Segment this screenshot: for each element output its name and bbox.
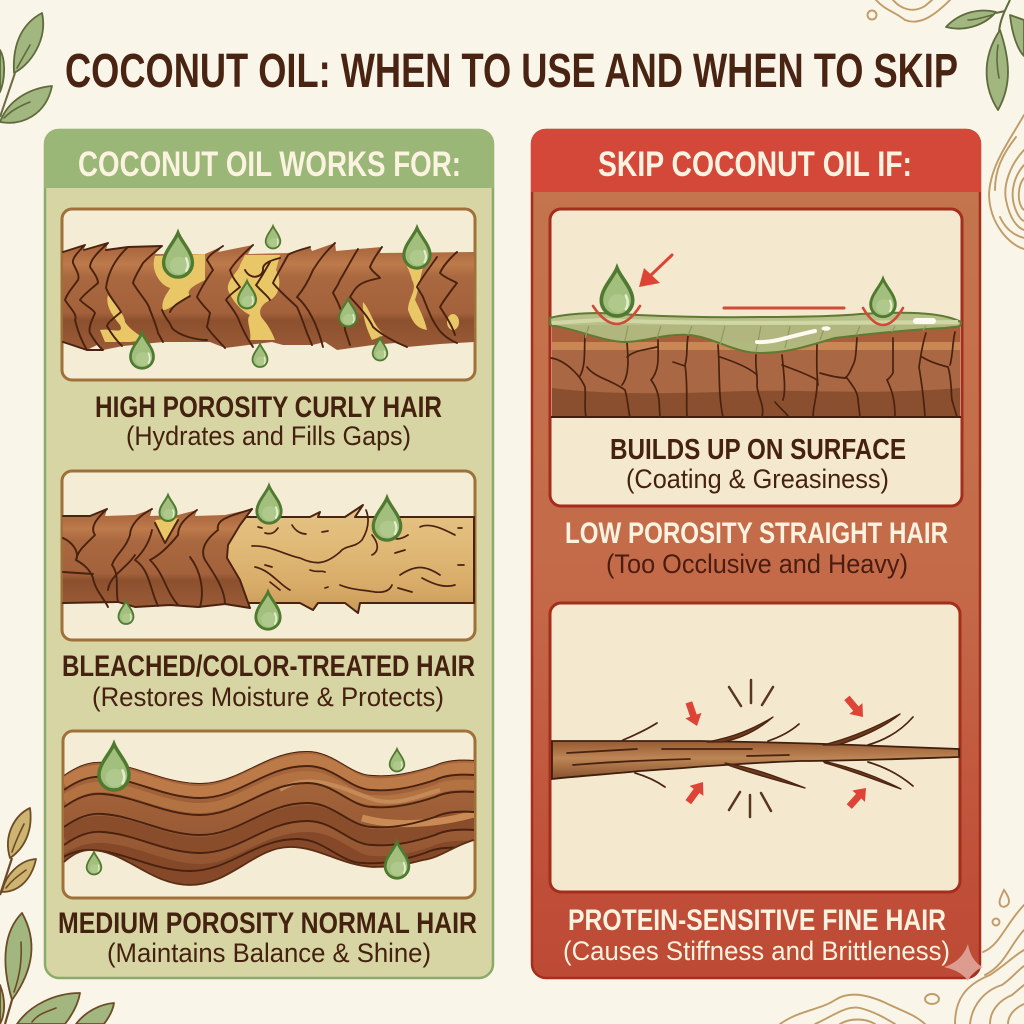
hair strand with scales <box>63 243 474 350</box>
oil drops <box>87 744 409 878</box>
decoration: top-right leaves <box>946 0 1024 110</box>
cracked hair cross-section <box>552 325 960 417</box>
sublabel: hydrates and fills gaps: (Hydrates and Fills Gaps) <box>126 421 411 451</box>
sublabel: coating and greasiness: (Coating & Greasiness) <box>626 464 889 494</box>
decoration: top contour lines <box>868 0 950 22</box>
panel: skip coconut oil if <box>531 129 981 978</box>
panel header: works for: COCONUT OIL WORKS FOR: <box>78 145 461 184</box>
brown section with scales <box>63 509 252 608</box>
card: protein-sensitive brittle hair <box>550 603 960 892</box>
card: builds up on surface <box>550 209 962 506</box>
oil drops <box>130 226 430 368</box>
oil layer <box>550 313 961 353</box>
decoration: bottom-right contour lines <box>780 890 1024 1024</box>
sparkle mark <box>944 944 983 981</box>
label: bleached hair: BLEACHED/COLOR-TREATED HAIR <box>62 650 475 683</box>
red surface line <box>724 306 844 310</box>
decoration: right contour lines <box>989 115 1024 249</box>
card: bleached hair illustration <box>62 471 475 640</box>
panel header: skip <box>531 129 981 192</box>
panel header: works for <box>44 129 494 188</box>
red arrow <box>639 255 672 287</box>
sublabel: too occlusive: (Too Occlusive and Heavy) <box>606 549 908 579</box>
decoration: bottom-left leaves <box>0 808 114 1024</box>
yellow gaps <box>100 254 459 342</box>
card: medium porosity wavy hair illustration <box>54 731 475 898</box>
hair tone bands and strands <box>54 751 474 875</box>
scale lines <box>63 243 457 350</box>
decoration: top-left leaves <box>0 13 52 123</box>
sublabel: causes stiffness: (Causes Stiffness and Brittleness) <box>563 936 950 966</box>
damaged tan section <box>215 505 474 613</box>
wavy hair <box>64 751 474 885</box>
panel: coconut oil works for <box>44 129 494 978</box>
sublabel: maintains balance: (Maintains Balance & Shine) <box>107 938 431 968</box>
label: builds up on surface: BUILDS UP ON SURFACE <box>610 434 906 466</box>
label: protein-sensitive fine hair: PROTEIN-SENSITIVE FINE HAIR <box>568 904 946 937</box>
red pressure arrows <box>681 692 872 812</box>
stress tick marks <box>729 680 773 817</box>
label: medium porosity: MEDIUM POROSITY NORMAL HAIR <box>58 907 477 940</box>
oil drops beading on surface <box>593 268 903 325</box>
panel header: skip: SKIP COCONUT OIL IF: <box>598 145 912 184</box>
card: high porosity curly hair illustration <box>62 209 475 380</box>
brittle hair strand <box>552 714 959 789</box>
fraying lines <box>252 510 464 592</box>
sublabel: restores moisture: (Restores Moisture & Protects) <box>92 682 444 712</box>
label: high porosity curly hair: HIGH POROSITY CURLY HAIR <box>95 391 442 424</box>
yellow gap <box>155 518 178 542</box>
oil drops <box>118 486 401 629</box>
